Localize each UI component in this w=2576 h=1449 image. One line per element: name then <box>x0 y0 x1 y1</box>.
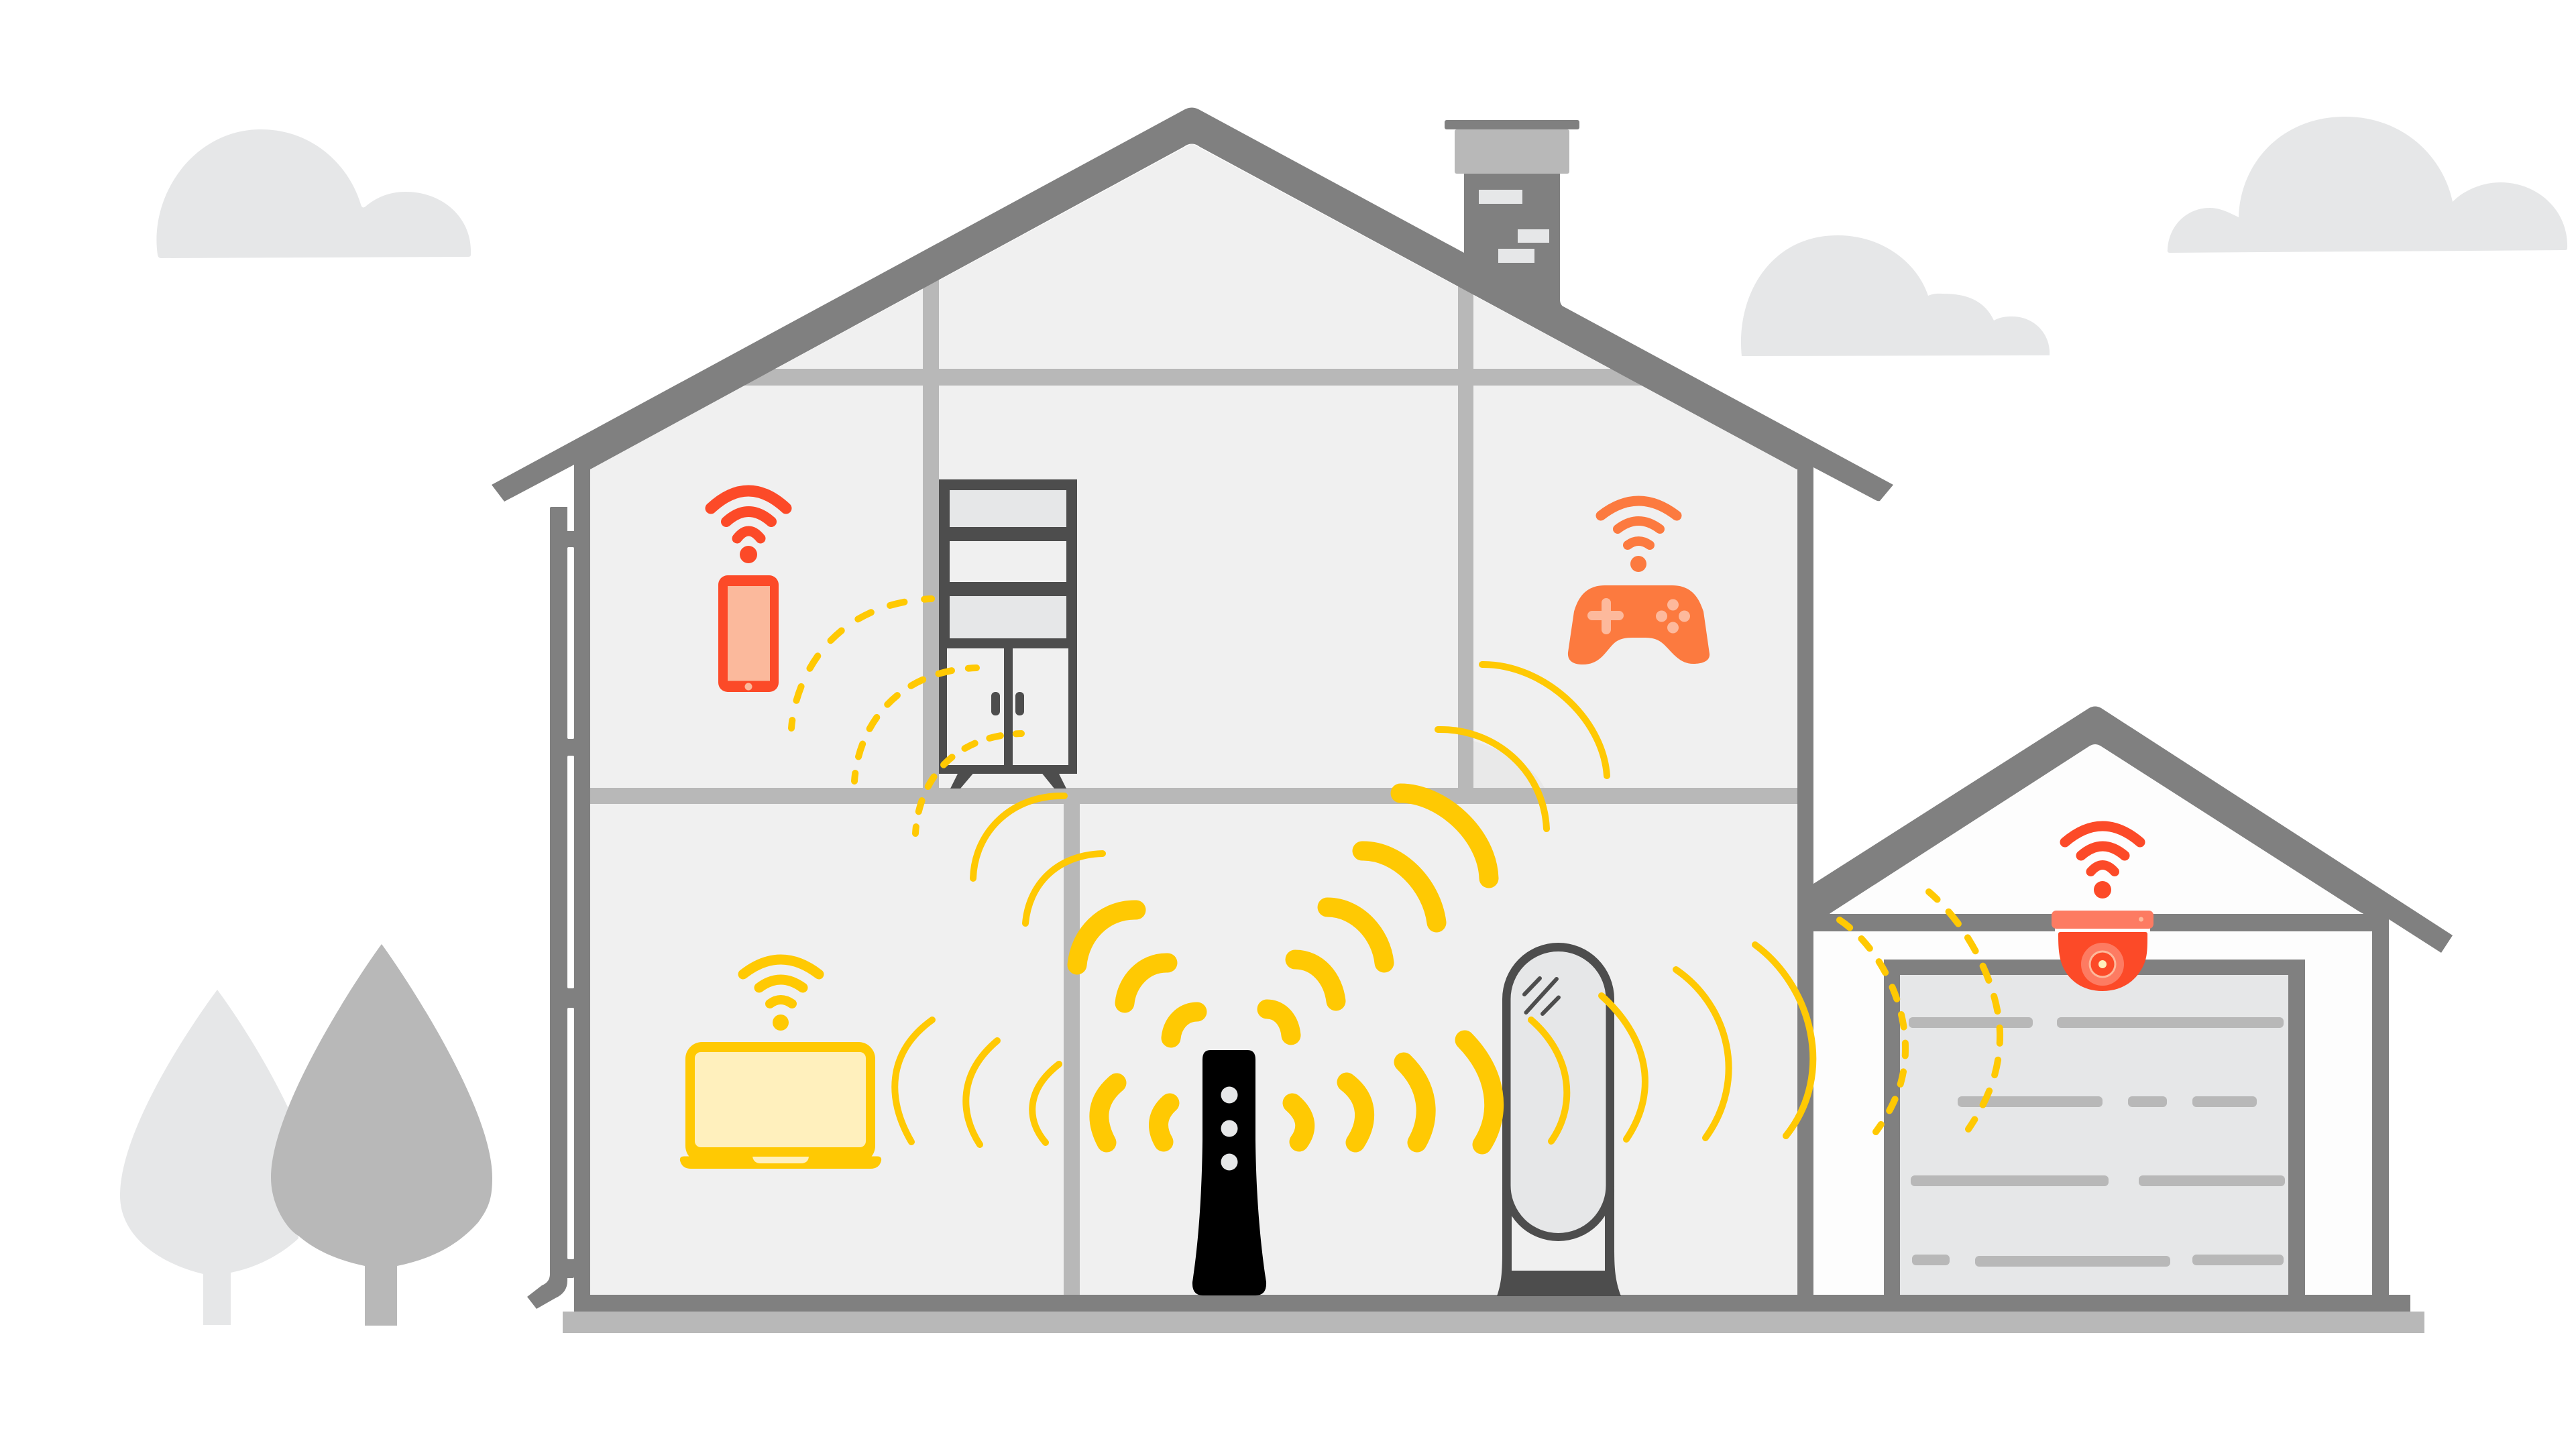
right wall <box>1797 463 1813 1312</box>
floor band <box>574 1295 2410 1312</box>
router lights <box>1221 1086 1238 1171</box>
shelf compartments <box>950 490 1066 638</box>
tree: front dark <box>271 944 492 1326</box>
camera mount plate <box>2052 911 2153 929</box>
bookshelf <box>939 479 1077 789</box>
mirror glass <box>1506 947 1610 1237</box>
controller buttons <box>1587 598 1690 634</box>
garage roof <box>1813 707 2453 953</box>
cloud: right top <box>2168 117 2567 253</box>
phone wifi symbol <box>711 491 786 563</box>
laptop base <box>680 1156 881 1169</box>
cabinet doors <box>947 648 1068 765</box>
phone body <box>718 575 779 692</box>
garage door slats <box>1909 1017 2285 1267</box>
camera dome <box>2058 932 2147 991</box>
camera lens <box>2081 943 2124 986</box>
router <box>1192 1050 1266 1295</box>
chimney cap <box>1455 129 1569 174</box>
cabinet handles <box>991 692 1024 715</box>
controller body <box>1568 585 1710 664</box>
camera indicator <box>2139 917 2143 921</box>
garage door panel <box>1900 975 2288 1296</box>
dashed wave to phone middle <box>854 668 976 781</box>
controller wifi symbol <box>1601 501 1677 572</box>
laptop screen <box>695 1052 866 1147</box>
laptop notch <box>752 1157 809 1163</box>
mirror window <box>1512 1207 1605 1271</box>
laptop wifi symbol <box>743 960 819 1031</box>
garage <box>1813 707 2453 1312</box>
mirror stand <box>1497 943 1621 1296</box>
mirror <box>1497 943 1621 1296</box>
security camera with wifi <box>2052 826 2153 991</box>
trees <box>120 944 492 1326</box>
chimney stack <box>1464 174 1567 309</box>
solid wifi signal waves <box>895 664 1813 1145</box>
game controller with wifi <box>1568 501 1710 664</box>
downspout <box>527 503 574 1309</box>
chimney bricks <box>1479 190 1549 263</box>
shaded wedge <box>1473 741 1545 788</box>
cloud: left <box>156 129 471 258</box>
dashed wave to garage left <box>1840 920 1905 1132</box>
shelf frame <box>939 479 1077 774</box>
phone button <box>744 683 752 691</box>
thick waves around router <box>1077 793 1494 1145</box>
foundation <box>563 1312 2424 1333</box>
laptop lid <box>685 1042 875 1163</box>
garage beam <box>1813 914 2372 931</box>
cloud: middle right <box>1741 235 2050 356</box>
laptop with wifi <box>680 960 881 1169</box>
floor and foundation <box>563 1295 2424 1333</box>
dashed wave to phone outer <box>791 599 932 728</box>
phone screen <box>728 586 770 681</box>
garage interior <box>1813 744 2372 1296</box>
clouds <box>156 117 2567 356</box>
dashed wave to garage right <box>1929 892 2000 1129</box>
chimney <box>1445 120 1579 309</box>
phone with wifi <box>711 491 786 692</box>
tree: back light <box>120 990 298 1325</box>
main house <box>492 107 1893 1312</box>
dashed wifi signal waves <box>791 599 2000 1132</box>
house interior <box>590 143 1797 1296</box>
interior beams <box>590 275 1797 1297</box>
router body <box>1192 1050 1266 1295</box>
chimney top plate <box>1445 120 1579 129</box>
roof <box>492 107 1893 502</box>
left wall <box>574 463 590 1312</box>
camera mount outline <box>2055 925 2150 933</box>
dashed wave to phone inner <box>915 734 1021 833</box>
camera wifi symbol <box>2065 826 2140 899</box>
garage door frame <box>1884 960 2305 1296</box>
garage right wall <box>2372 912 2389 1312</box>
shelf legs <box>950 771 1066 789</box>
mirror glints <box>1524 978 1559 1014</box>
thin waves <box>895 664 1813 1145</box>
